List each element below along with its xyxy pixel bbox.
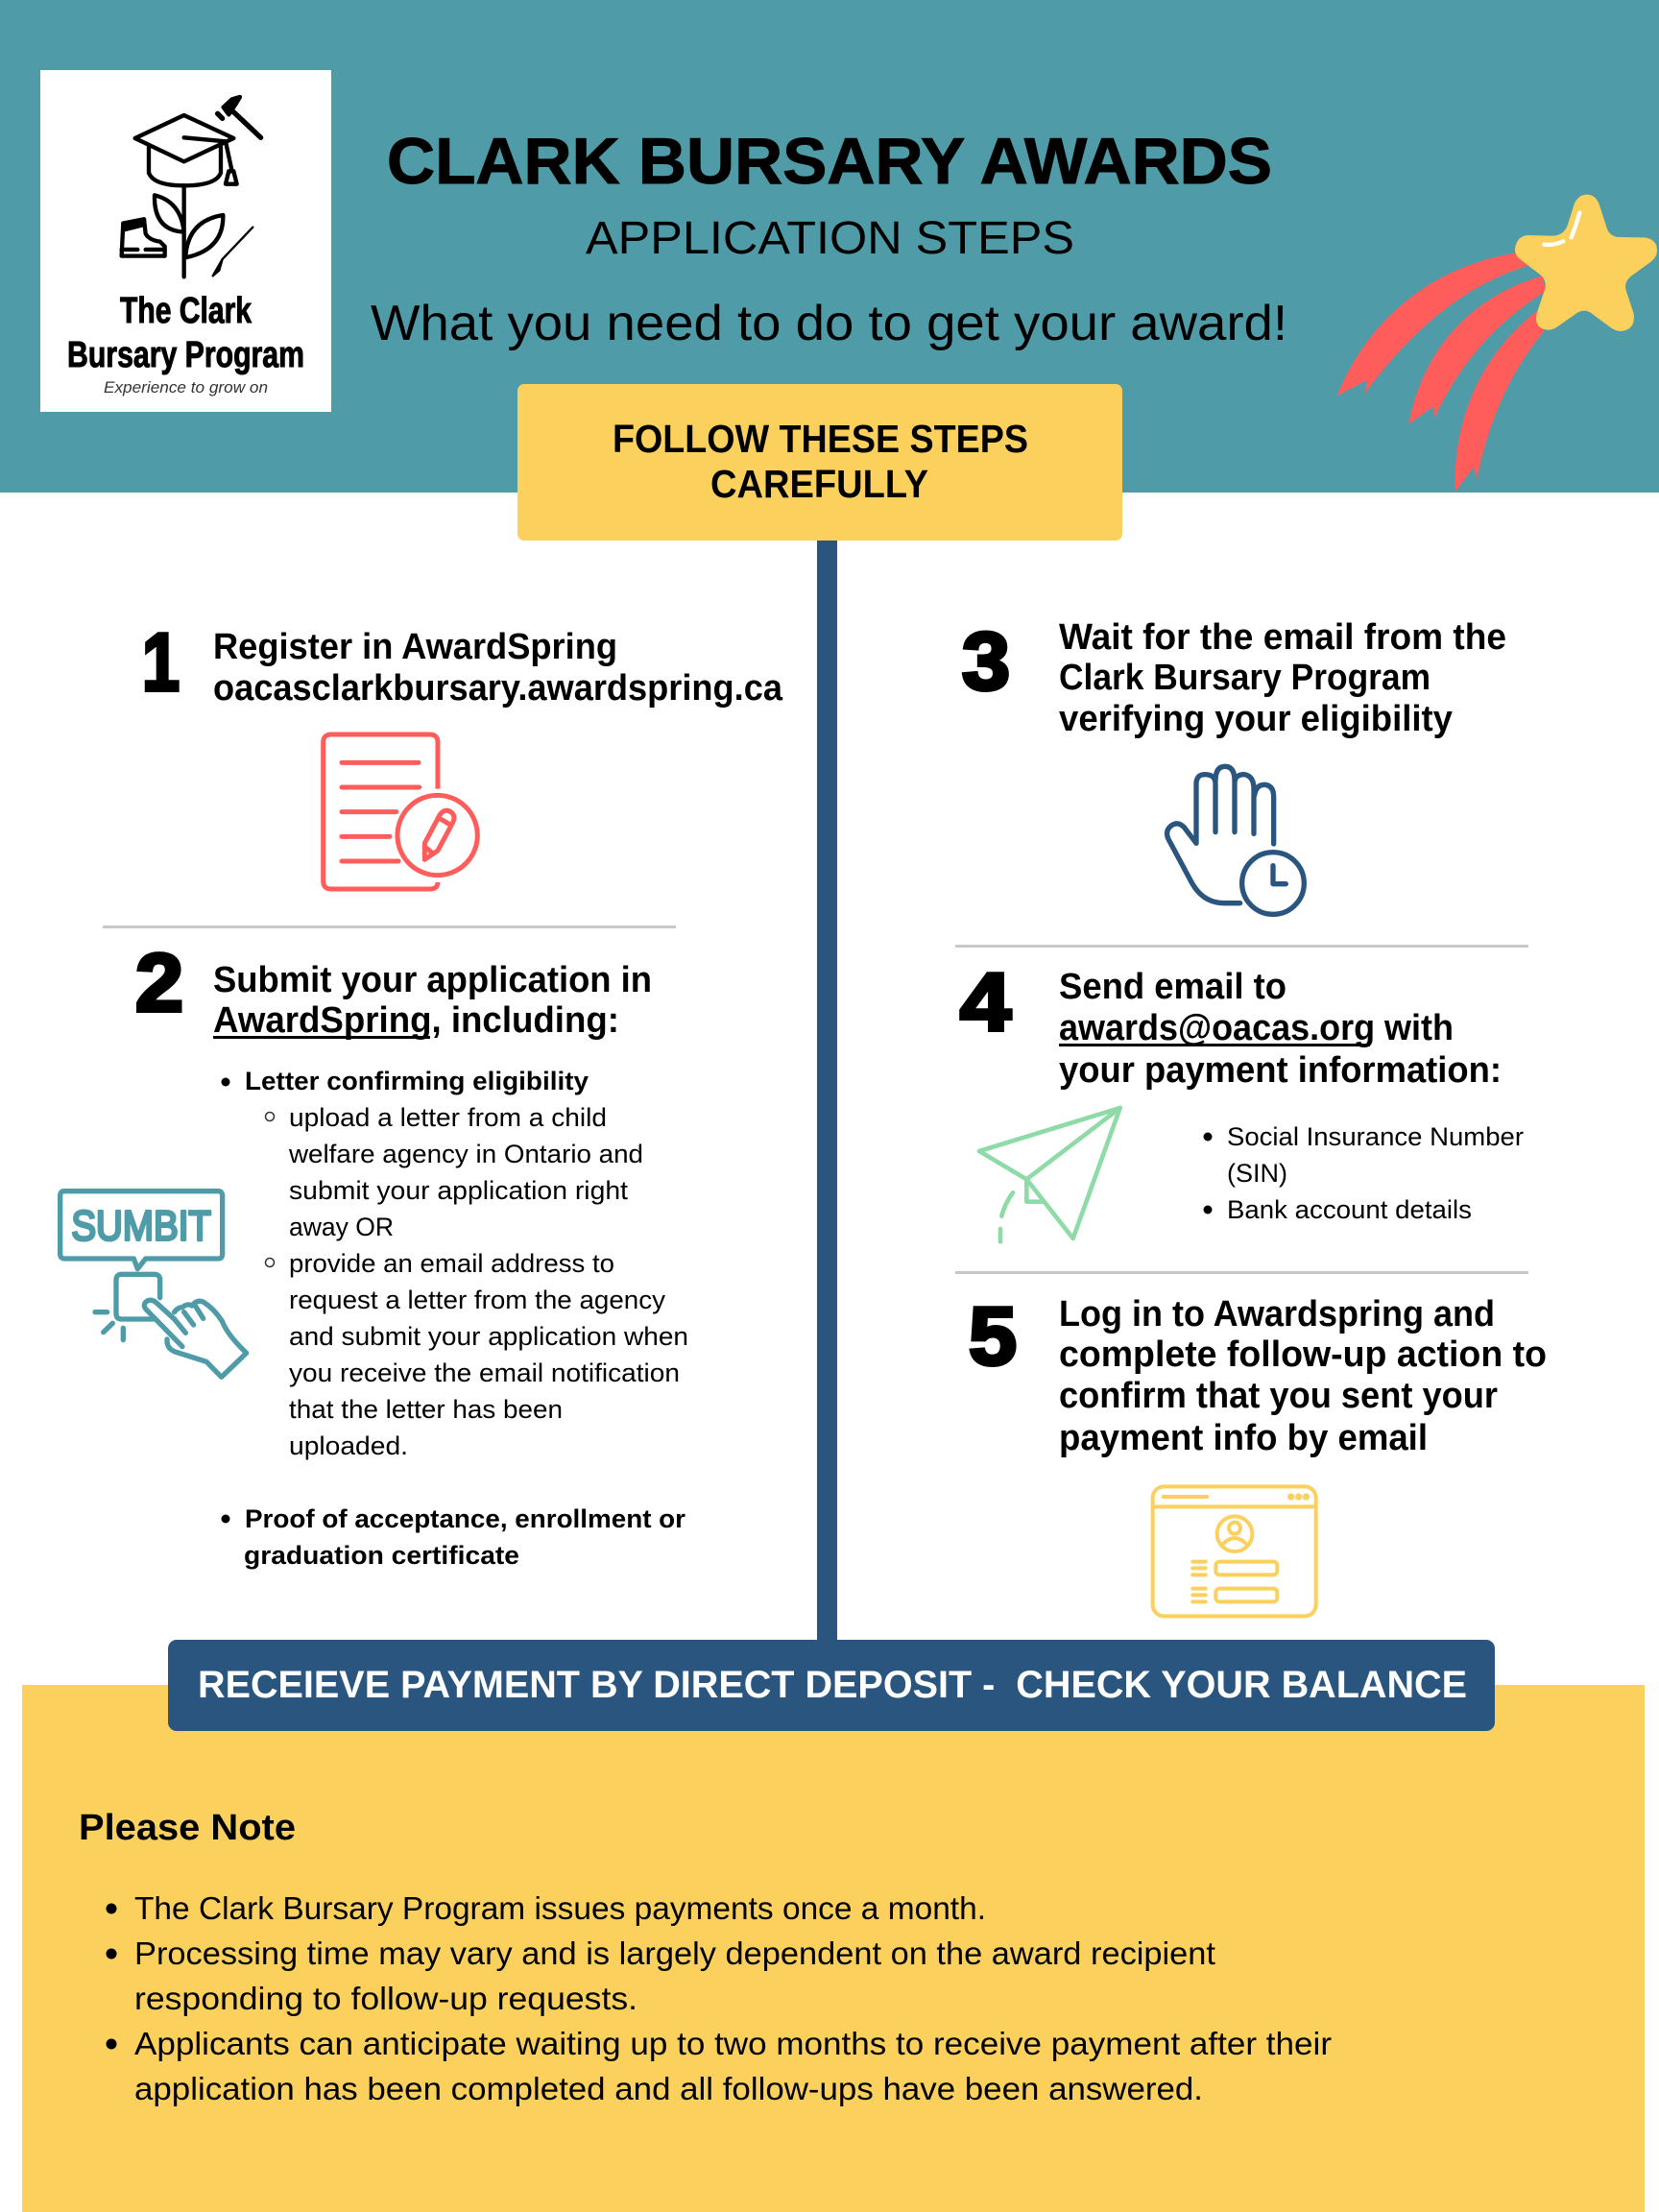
- requirement: proof of acceptance: [221, 1504, 686, 1570]
- title: CLARK BURSARY AWARDS: [387, 125, 1272, 198]
- step 2 heading: Submit your application in: [213, 960, 652, 1000]
- requirement: letter confirming eligibility: you receive the email notification: [289, 1358, 680, 1387]
- step 4 text: your payment information:: [1059, 1050, 1502, 1091]
- banner: receive payment: RECEIEVE PAYMENT BY DIRECT DEPOSIT - CHECK YOUR BALANCE: [198, 1664, 1467, 1706]
- logo name: Bursary Program: [67, 335, 304, 375]
- step 3 text: Clark Bursary Program: [1059, 658, 1431, 698]
- note heading: Please Note: [79, 1808, 296, 1848]
- payment info list: Bank account details: [1227, 1195, 1472, 1224]
- payment info list: Social Insurance Number: [1227, 1122, 1524, 1151]
- requirement: letter confirming eligibility: [221, 1067, 688, 1460]
- step 1 text: Register in AwardSpring: [213, 627, 617, 667]
- divider: [955, 1271, 1528, 1274]
- step 1 text: [213, 627, 783, 709]
- requirement: proof of acceptance: graduation certificate: [244, 1541, 519, 1570]
- step 5 text: payment info by email: [1059, 1418, 1428, 1458]
- banner: receive payment: [168, 1640, 1495, 1731]
- callout: follow these steps: CAREFULLY: [710, 462, 928, 506]
- step 4: [960, 957, 1524, 1241]
- step 4 number: 4: [960, 957, 1011, 1048]
- requirement: letter confirming eligibility: welfare agency in Ontario and: [288, 1140, 643, 1168]
- callout: follow these steps: [517, 384, 1122, 541]
- step 1 number: 1: [142, 617, 180, 709]
- step 5 text: Log in to Awardspring and: [1059, 1294, 1495, 1334]
- requirement: letter confirming eligibility: upload a letter from a child: [289, 1103, 607, 1132]
- icon: document with pencil: [324, 734, 477, 889]
- step 5: [969, 1291, 1547, 1616]
- logo name: [67, 291, 304, 375]
- note list: Applicants can anticipate waiting up to two months to receive payment after their: [134, 2026, 1332, 2061]
- requirement: letter confirming eligibility: request a letter from the agency: [289, 1286, 665, 1314]
- requirement: letter confirming eligibility: provide an email address to: [289, 1249, 614, 1278]
- note list: The Clark Bursary Program issues payments once a month.: [134, 1890, 986, 1926]
- header band: [0, 0, 1659, 493]
- icon: submit button and hand: [60, 1191, 247, 1377]
- step 2: [60, 938, 688, 1570]
- step 3: [962, 616, 1506, 914]
- step 5 text: [1059, 1294, 1547, 1458]
- requirement: letter confirming eligibility: away OR: [289, 1213, 394, 1241]
- note list: [106, 1890, 1332, 2106]
- step 3 text: [1059, 617, 1506, 739]
- payment info list: [1204, 1122, 1524, 1224]
- requirement: proof of acceptance: Proof of acceptance, enrollment or: [245, 1504, 686, 1533]
- divider: [955, 945, 1528, 948]
- step 4 text: [1059, 967, 1502, 1091]
- vertical timeline bar: [817, 541, 837, 1645]
- divider: [103, 926, 676, 928]
- callout: follow these steps: FOLLOW THESE STEPS: [613, 417, 1028, 461]
- note list: responding to follow-up requests.: [134, 1981, 637, 2016]
- payment info list: (SIN): [1227, 1159, 1287, 1188]
- panel: please note: [22, 1685, 1645, 2212]
- requirement: letter confirming eligibility: uploaded.: [289, 1431, 408, 1460]
- step 4 text: Send email to: [1059, 967, 1286, 1007]
- icon: paper plane: [979, 1108, 1120, 1241]
- logo panel: [40, 70, 331, 412]
- step 2 heading: [213, 960, 652, 1041]
- step 3 text: verifying your eligibility: [1059, 699, 1453, 739]
- subtitle: APPLICATION STEPS: [586, 213, 1074, 264]
- icon: hand with clock: [1167, 766, 1304, 914]
- step 4 text: awards@oacas.org with: [1059, 1008, 1454, 1048]
- step 5 text: confirm that you sent your: [1059, 1376, 1498, 1416]
- icon: submit button and hand: SUMBIT: [71, 1203, 211, 1250]
- requirement: letter confirming eligibility: and submit your application when: [289, 1322, 688, 1351]
- step 1 text: oacasclarkbursary.awardspring.ca: [213, 668, 783, 709]
- note list: application has been completed and all follow-ups have been answered.: [134, 2071, 1203, 2106]
- logo tagline: Experience to grow on: [104, 378, 268, 397]
- logo name: The Clark: [120, 291, 252, 331]
- step 2 heading: AwardSpring, including:: [213, 1000, 619, 1041]
- requirement: letter confirming eligibility: Letter confirming eligibility: [245, 1067, 589, 1095]
- step 3 text: Wait for the email from the: [1059, 617, 1506, 658]
- step 3 number: 3: [962, 616, 1010, 708]
- icon: shooting star: [1337, 195, 1657, 493]
- step 2 number: 2: [135, 938, 183, 1029]
- step 5 number: 5: [969, 1291, 1017, 1382]
- step 5 text: complete follow-up action to: [1059, 1334, 1547, 1375]
- tagline: What you need to do to get your award!: [371, 296, 1287, 351]
- note list: Processing time may vary and is largely dependent on the award recipient: [134, 1936, 1215, 1971]
- requirement: letter confirming eligibility: that the letter has been: [289, 1395, 563, 1424]
- requirement: letter confirming eligibility: submit your application right: [289, 1176, 629, 1205]
- logo icon: cap, flower, boot, hammer, brush: [122, 97, 261, 276]
- icon: login window: [1153, 1486, 1316, 1616]
- step 1: [142, 617, 783, 889]
